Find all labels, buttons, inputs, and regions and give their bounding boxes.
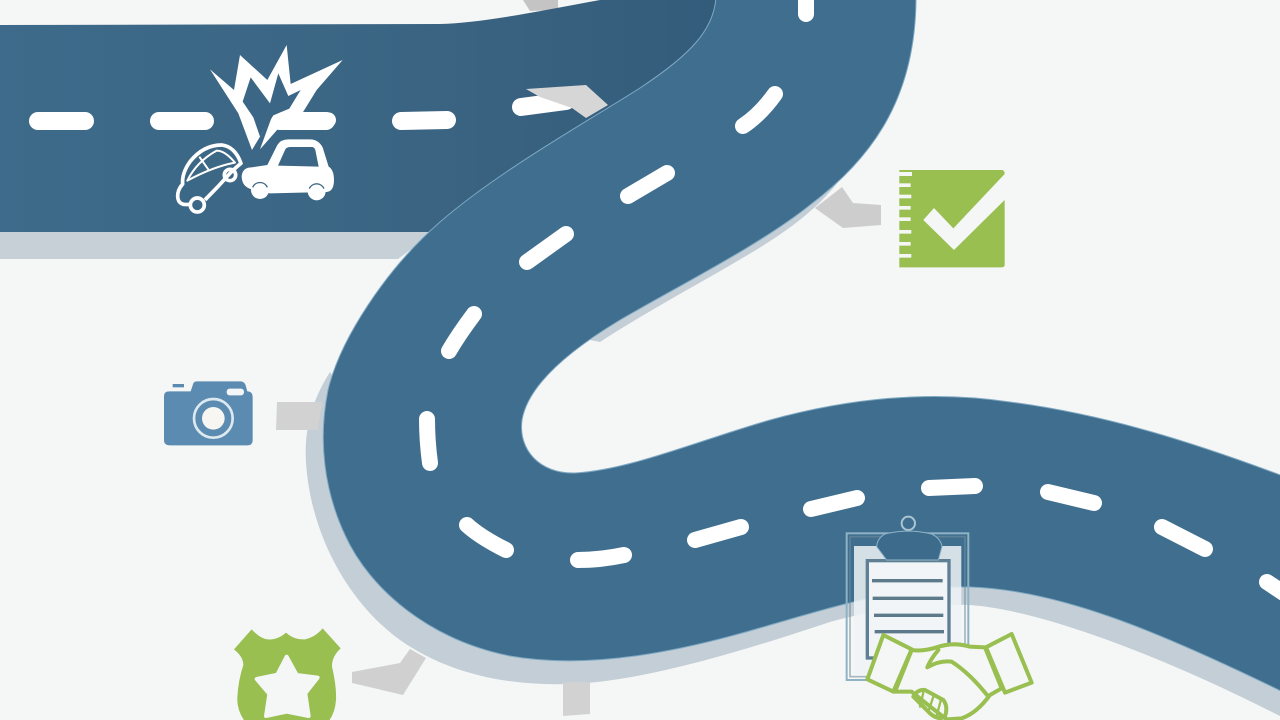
road: top-left segment	[0, 0, 716, 232]
connector: crash sign on road	[526, 85, 608, 118]
right car	[242, 139, 334, 200]
road shadow: top segment	[0, 228, 440, 259]
icon: camera	[164, 381, 253, 445]
lane markings: main road	[427, 0, 1280, 594]
road shadow: lower curve	[306, 372, 1280, 716]
connector: bottom	[563, 682, 590, 716]
explosion	[210, 45, 343, 150]
icon: car crash	[178, 45, 343, 212]
left car	[178, 145, 241, 212]
road: main winding segment	[323, 0, 1280, 692]
connector: checklist	[815, 187, 881, 228]
connector: camera	[276, 402, 322, 430]
connector: police badge	[352, 649, 426, 695]
spiral binding	[897, 172, 912, 258]
clipboard	[847, 517, 968, 680]
icon: clipboard and handshake	[847, 517, 1032, 719]
road shadow: middle curve	[590, 168, 848, 342]
signpost: top	[523, 0, 558, 11]
lane markings: top road	[38, 101, 566, 121]
handshake	[867, 634, 1032, 719]
explosion centre	[243, 73, 301, 137]
dash over explosion	[275, 112, 336, 128]
icon: green checklist	[897, 170, 1005, 267]
icon: police badge	[234, 628, 341, 720]
badge star	[257, 657, 318, 716]
